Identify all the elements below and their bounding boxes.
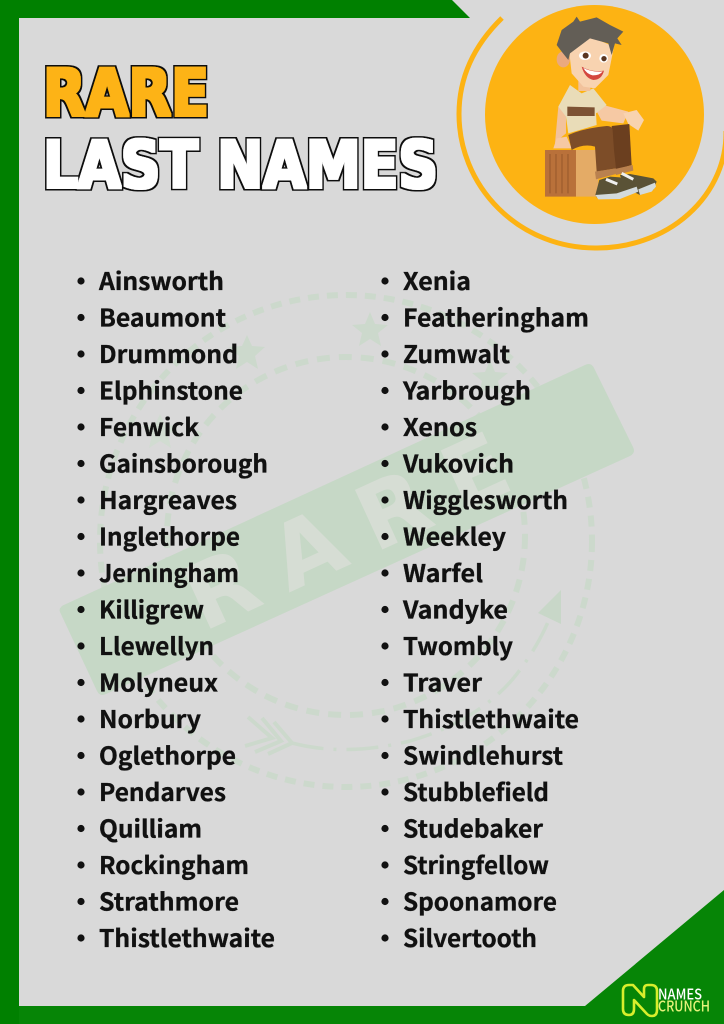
title — [43, 56, 438, 204]
decorative orange arc — [459, 18, 724, 248]
name list: right column: Stubblefield — [403, 773, 549, 808]
name list: left column: Thistlethwaite — [99, 919, 275, 954]
name list: left column: Ainsworth — [98, 262, 224, 297]
name list: left column: Oglethorpe — [99, 736, 236, 772]
name list: left column: Hargreaves — [99, 481, 237, 516]
name list: right column: Vukovich — [402, 444, 514, 480]
watermark: rare stamp — [60, 295, 634, 787]
name list: left column: Quilliam — [99, 810, 202, 844]
name list: right column: Traver — [403, 664, 483, 698]
name list: right column: Weekley — [403, 518, 506, 552]
name list: left column: Fenwick — [99, 408, 199, 443]
name list: right column: Vandyke — [402, 590, 508, 626]
name list: left column — [77, 262, 275, 954]
name list: left column: Strathmore — [99, 882, 239, 918]
name list: left column: Pendarves — [99, 773, 226, 808]
name list: left column: Llewellyn — [99, 627, 214, 662]
green frame bottom right corner — [19, 890, 724, 1024]
name list: right column: Yarbrough — [402, 372, 531, 406]
name list: right column: Thistlethwaite — [403, 700, 579, 735]
name list: right column: Spoonamore — [403, 882, 557, 918]
name list: left column: Norbury — [99, 700, 201, 735]
name list: right column: Twombly — [403, 627, 513, 662]
name list: right column: Swindlehurst — [403, 736, 563, 772]
logo text — [658, 984, 710, 1016]
name list: left column: Elphinstone — [99, 372, 243, 406]
name list: right column: Silvertooth — [403, 919, 537, 954]
name list: left column: Inglethorpe — [99, 518, 240, 552]
name list: left column: Beaumont — [99, 298, 226, 334]
icon: boy sitting on crate — [545, 17, 657, 199]
name list: right column: Featheringham — [403, 298, 589, 334]
name list: right column: Zumwalt — [403, 335, 510, 370]
name list: left column: Drummond — [99, 335, 238, 370]
name list: right column — [381, 262, 589, 954]
logo text: CRUNCH — [658, 996, 710, 1016]
orange circle — [485, 5, 704, 224]
title line: last names: LAST NAMES — [43, 128, 438, 204]
green frame top and left — [0, 0, 470, 1024]
logo: names crunch — [623, 984, 710, 1016]
name list: right column: Warfel — [403, 554, 483, 589]
name list: right column: Xenos — [403, 408, 477, 443]
icon: logo N — [623, 985, 657, 1016]
name list: right column: Wigglesworth — [403, 481, 568, 516]
name list: right column: Xenia — [403, 262, 471, 297]
logo text: NAMES — [658, 984, 702, 1004]
watermark: rare stamp: RARE — [168, 412, 526, 652]
name list: left column: Jerningham — [99, 554, 239, 589]
name list: right column: Stringfellow — [403, 846, 549, 881]
name list: left column: Killigrew — [99, 590, 204, 626]
name list: left column: Rockingham — [99, 846, 249, 881]
name list: left column: Molyneux — [99, 664, 219, 698]
name list: left column: Gainsborough — [99, 444, 268, 480]
name list: right column: Studebaker — [403, 810, 544, 844]
title line: rare: RARE — [43, 56, 209, 132]
